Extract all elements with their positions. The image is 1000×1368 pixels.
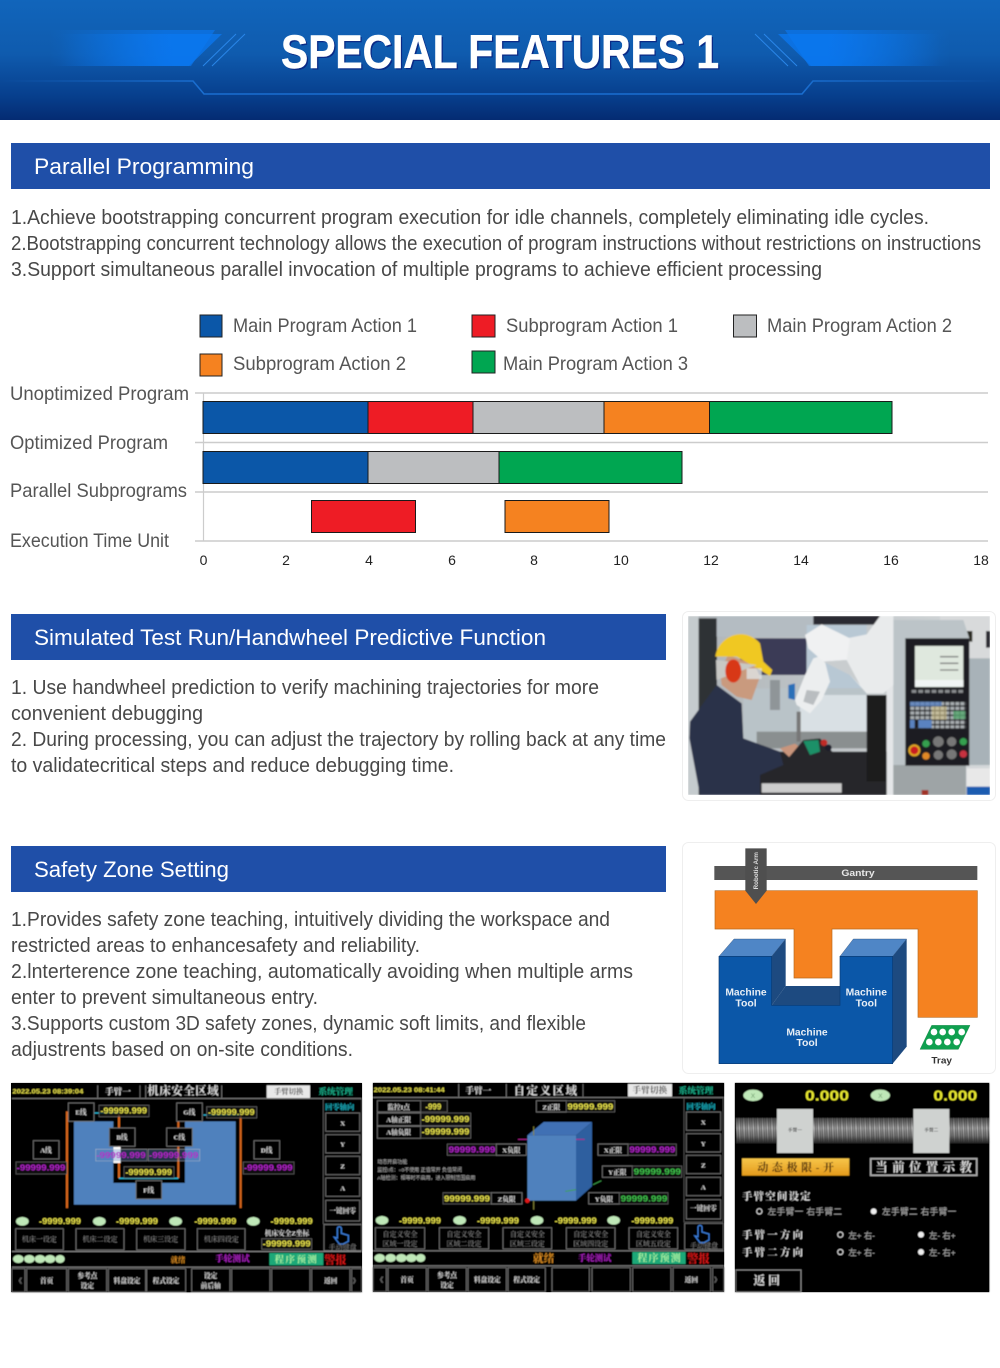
arm position readouts: 0.000 [805,1089,849,1105]
text block: safety zone points: 1.Provides safety zone teaching, intuitively dividing the workspace and [11,909,610,931]
zone diagram: -99999.999 [244,1164,293,1173]
handheld pendant [788,738,833,762]
custom zone buttons: 自定义安全 [510,1230,545,1239]
axis tick labels [200,552,989,568]
axis readouts: -9999.999 [477,1216,520,1225]
screen title bar: 自定义区域 [514,1083,579,1097]
chart legend: Subprogram Action 1 [506,315,678,337]
bar chart: execution time: Unoptimized Program [10,383,189,405]
zone diagram: -99999.999 [208,1108,255,1117]
axis tick labels: 10 [613,552,629,568]
tray: Tray [931,1055,953,1065]
status bar: 程序预测 [275,1253,317,1265]
zone diagram: D线 [261,1145,273,1154]
axis button column: Y [340,1142,345,1149]
control screen: custom zone [373,1083,724,1292]
axis readouts: -9999.999 [271,1217,313,1226]
bottom navigation: 参考点 [77,1271,99,1280]
bar chart: execution time: Parallel Subprograms [10,480,187,502]
screen title bar [373,1083,724,1098]
zone diagram: -99999.999 [149,1151,199,1160]
gantry [714,866,977,880]
status bar [373,1250,724,1266]
axis readouts: -9999.999 [39,1217,82,1226]
section heading: Simulated Test Run [11,614,666,660]
robotic arm [745,848,767,904]
custom zone buttons: 区域二设定 [447,1239,481,1248]
zone diagram: -99999.999 [125,1168,173,1177]
text block: safety zone points: restricted areas to enhancesafety and reliability. [11,935,420,957]
text block: safety zone points: 3.Supports custom 3D safety zones, dynamic soft limits, and flexible [11,1013,586,1035]
zone limit readouts: 99999.999 [567,1102,614,1111]
zone limit readouts: 99999.999 [444,1194,491,1203]
axis button column: X [340,1120,345,1127]
screen title bar: 手臂一 [105,1086,131,1097]
zone diagram: -99999.999 [96,1151,146,1160]
chart legend: Main Program Action 2 [767,315,952,337]
zone diagram: -99999.999 [100,1107,148,1116]
bottom navigation: 参考点 [437,1270,458,1279]
zone limit readouts: X负限 [502,1146,521,1155]
bottom navigation [12,1269,362,1292]
zone diagram: G线 [183,1108,196,1117]
robotic arm: Robotic Arm [753,852,760,889]
zone limit readouts: 99999.999 [449,1146,496,1155]
zone diagram [16,1103,294,1208]
arm space settings: 手臂二方向 [742,1246,805,1259]
bottom navigation [373,1268,724,1292]
screen title bar: 机床安全区域 [147,1084,219,1098]
text block: safety zone points [11,909,633,1061]
ball screw with carriages: 手臂二 [924,1127,939,1134]
zone limit readouts: X正限 [604,1146,622,1155]
axis button column: Y [701,1141,706,1148]
title: SPECIAL FEATURES 1 [282,26,720,80]
screen title bar: 手臂一 [465,1085,492,1096]
zone setting buttons: 机床一设定 [22,1234,57,1243]
dynamic limit note: 动态开启功能 [377,1158,407,1165]
text block: safety zone points: enter to prevent simultaneous entry. [11,987,318,1009]
axis button column: 一键回零 [329,1206,356,1215]
diagram card: safety zone layout [682,842,996,1074]
zone limit readouts: Z正限 [542,1102,561,1111]
zone limit readouts: -99999.999 [422,1128,470,1137]
arm position readouts [743,1089,977,1105]
zone diagram: B线 [116,1133,128,1142]
axis tick labels: 0 [200,552,208,568]
status bar: 警报 [324,1252,346,1266]
zone diagram: A线 [40,1145,52,1154]
bottom navigation: 首页 [40,1276,54,1285]
robot arm [846,616,888,694]
zone setting buttons: 手动键盘 [329,1242,357,1251]
zone limit readouts: Z负限 [498,1194,516,1203]
status bar: 警报 [687,1251,710,1265]
zone diagram: F线 [143,1185,154,1194]
text block: safety zone points: adjustrents based on on-site conditions. [11,1039,353,1061]
back button [736,1270,801,1292]
bottom navigation: 返回 [685,1275,698,1284]
bottom navigation: 首页 [400,1275,414,1284]
section heading: Parallel Programming [11,143,990,189]
axis tick labels: 6 [448,552,456,568]
custom zone buttons: 区域一设定 [383,1239,417,1248]
custom zone buttons: 自定义安全 [447,1230,481,1239]
zone limit readouts: 99999.999 [629,1146,676,1155]
bottom navigation: 《 [15,1277,22,1285]
bottom navigation: 前后轴 [201,1281,221,1290]
arm space settings: 手臂一方向 [742,1229,805,1242]
ball screw with carriages: 手臂一 [788,1127,802,1134]
machine tool block: Tool [796,1038,818,1049]
arm space settings: 左- 右+ [929,1230,956,1240]
chart legend: Main Program Action 1 [233,315,417,337]
text block: handwheel points: to validatecritical steps and reduce debugging time. [11,755,454,777]
screen title bar: 系统管理 [679,1084,714,1095]
zone diagram: E线 [75,1108,87,1117]
dynamic limit note: A轴检测：相等时不启用，进入限制范围启用 [377,1174,475,1181]
title: SPECIAL FEATURES 1 [281,25,719,78]
bottom navigation: 返回 [324,1276,338,1285]
axis readouts: -9999.999 [399,1216,442,1225]
section heading: Parallel Programming: Parallel Programming [34,154,254,179]
control screen: arm space settings [735,1083,989,1292]
bottom navigation: 》 [714,1276,721,1284]
zone setting buttons: 机床安全Z坐标 [265,1229,311,1238]
axis readouts [376,1216,674,1225]
arm space settings: 左+ 右- [848,1230,875,1240]
axis readouts: -9999.999 [555,1216,597,1225]
machine tool block: Machine [846,988,888,999]
action buttons: 动态极限-开 [757,1160,834,1174]
gantry: Gantry [841,868,876,878]
text block: handwheel points [11,677,666,777]
text block: parallel programming points [11,207,981,281]
zone setting buttons [16,1225,362,1251]
machine tool block: Machine [786,1027,828,1038]
tray [920,1025,970,1065]
arm space settings: 左- 右+ [929,1248,956,1258]
action buttons: 当前位置示教 [875,1160,973,1175]
axis tick labels: 2 [282,552,290,568]
axis tick labels: 8 [530,552,538,568]
custom zone buttons: 手动键盘 [690,1241,718,1250]
zone setting buttons: 机床三设定 [143,1234,178,1243]
bottom navigation: 》 [353,1277,359,1285]
bars: unoptimized program [203,402,892,434]
arm space settings: 左手臂二 右手臂一 [882,1205,957,1216]
control screen: machine safety zone [11,1083,362,1292]
arm space settings: 手臂空间设定 [742,1190,812,1203]
bars: parallel subprograms [312,500,609,532]
zone limit readouts: 监控I点 [387,1102,411,1111]
text block: handwheel points: convenient debugging [11,703,203,725]
axis button column: X [701,1120,706,1127]
screen title bar: 手臂切换 [632,1084,668,1095]
text block: handwheel points: 2. During processing, you can adjust the trajectory by rolling back at any time [11,729,666,751]
arm space settings [742,1190,957,1259]
machine tool block: Tool [856,999,877,1010]
axis button column: 回零轴向 [686,1102,716,1111]
bar chart: execution time: Execution Time Unit [10,530,170,552]
machine tool block: Machine [725,988,767,999]
axis button column: 一键回零 [690,1204,717,1213]
3D zone box [518,1122,601,1210]
axis readouts [16,1217,313,1226]
arm space settings: 左手臂一 右手臂二 [768,1205,842,1216]
axis readouts: -9999.999 [116,1217,159,1226]
zone limit readouts: 99999.999 [634,1168,682,1177]
zone limit readouts: A轴负限 [386,1128,411,1137]
zone limit readouts: A轴正限 [386,1115,411,1124]
section heading: Simulated Test Run: Simulated Test Run/Handwheel Predictive Function [34,625,546,650]
dynamic limit note: 监控I点：=0不使用 正值常开 负值常闭 [377,1166,462,1173]
bar chart: execution time: Optimized Program [10,432,168,454]
arm position readouts: X [751,1093,756,1100]
screen title bar [12,1084,362,1099]
zone setting buttons: -99999.999 [263,1240,311,1249]
machine column [885,686,894,795]
status bar [12,1251,362,1268]
section heading: Safety Zone Setting [11,846,666,892]
axis button column: Z [701,1162,706,1169]
custom zone buttons: 区域四设定 [573,1239,608,1248]
axis tick labels: 12 [703,552,719,568]
screen title bar: 手臂切换 [274,1087,304,1096]
axis button column [323,1099,362,1224]
text block: handwheel points: 1. Use handwheel prediction to verify machining trajectories for more [11,677,599,699]
bottom navigation: 设定 [81,1281,94,1290]
arm space settings: 左+ 右- [848,1248,875,1258]
status bar: 手轮测试 [215,1253,250,1264]
zone diagram: -99999.999 [17,1164,66,1173]
axis button column: A [701,1184,706,1191]
status bar: 手轮测试 [578,1253,612,1263]
axis tick labels: 4 [365,552,373,568]
axis button column: 回零轴向 [325,1102,354,1111]
axis readouts: -9999.999 [631,1216,674,1225]
screen title bar: 系统管理 [318,1085,353,1096]
text block: safety zone points: 2.lnterterence zone teaching, automatically avoiding when multiple arms [11,961,633,983]
orange safety zone [715,891,977,1017]
bottom navigation: 料盘设定 [114,1276,141,1285]
custom zone buttons: 自定义安全 [636,1230,671,1239]
bottom navigation: 程式设定 [153,1276,180,1285]
custom zone buttons [375,1223,723,1250]
zone setting buttons: 机床四设定 [204,1234,239,1243]
bottom navigation: 设定 [204,1271,218,1280]
custom zone buttons: 自定义安全 [383,1230,417,1239]
zone setting buttons: 机床二设定 [83,1234,117,1243]
bottom navigation: 料盘设定 [474,1275,501,1284]
axis button column: A [340,1185,345,1192]
action buttons [742,1158,977,1176]
screen title bar: 2022.05.23 08:39:04 [12,1089,84,1095]
axis tick labels: 18 [973,552,989,568]
machine tool block [719,939,907,1064]
status bar: 就绪 [533,1252,555,1265]
axis button column: Z [340,1164,345,1171]
zone limit readouts: Y负限 [595,1194,613,1203]
header banner [0,0,1000,120]
status bar: 就绪 [171,1255,186,1264]
zone limit readouts: 99999.999 [621,1194,668,1203]
section heading: Safety Zone Setting: Safety Zone Setting [34,857,229,882]
dynamic limit note [377,1158,475,1181]
bars: optimized program [203,452,682,484]
zone limit readouts: -99999.999 [422,1115,470,1124]
screen title bar: 2022.05.23 08:41:44 [374,1088,446,1094]
machine tool block: Tool [735,999,757,1010]
zone limit readouts [377,1101,682,1204]
zone limit readouts: Y正限 [608,1168,627,1177]
axis readouts: -9999.999 [194,1217,237,1226]
status bar: 程序预测 [637,1251,681,1264]
axis tick labels: 16 [883,552,899,568]
chart legend [200,315,952,376]
zone limit readouts: -999 [425,1102,442,1111]
custom zone buttons: 区域五设定 [636,1239,671,1248]
bar chart: execution time [10,383,989,568]
text block: parallel programming points: 1.Achieve bootstrapping concurrent program execution for idle channels, completely eliminating idle cycles. [11,207,929,229]
bottom navigation: 《 [377,1276,384,1284]
back button: 返回 [753,1273,783,1288]
bottom navigation: 设定 [440,1280,454,1289]
axis tick labels: 14 [793,552,809,568]
custom zone buttons: 区域三设定 [510,1239,545,1248]
text block: parallel programming points: 3.Support simultaneous parallel invocation of multiple programs to achieve efficient processing [11,259,822,281]
arm position readouts: 0.000 [933,1089,977,1105]
axis button column [684,1098,723,1222]
custom zone buttons: 自定义安全 [573,1230,608,1239]
chart legend: Subprogram Action 2 [233,353,406,375]
zone diagram: C线 [174,1133,185,1142]
operator [689,685,783,795]
photo card: operator and robot arm at CNC machine [682,612,996,800]
chart legend: Main Program Action 3 [503,353,688,375]
bottom navigation: 程式设定 [513,1275,540,1284]
ball screw with carriages [736,1109,989,1153]
arm position readouts: X [878,1093,883,1100]
